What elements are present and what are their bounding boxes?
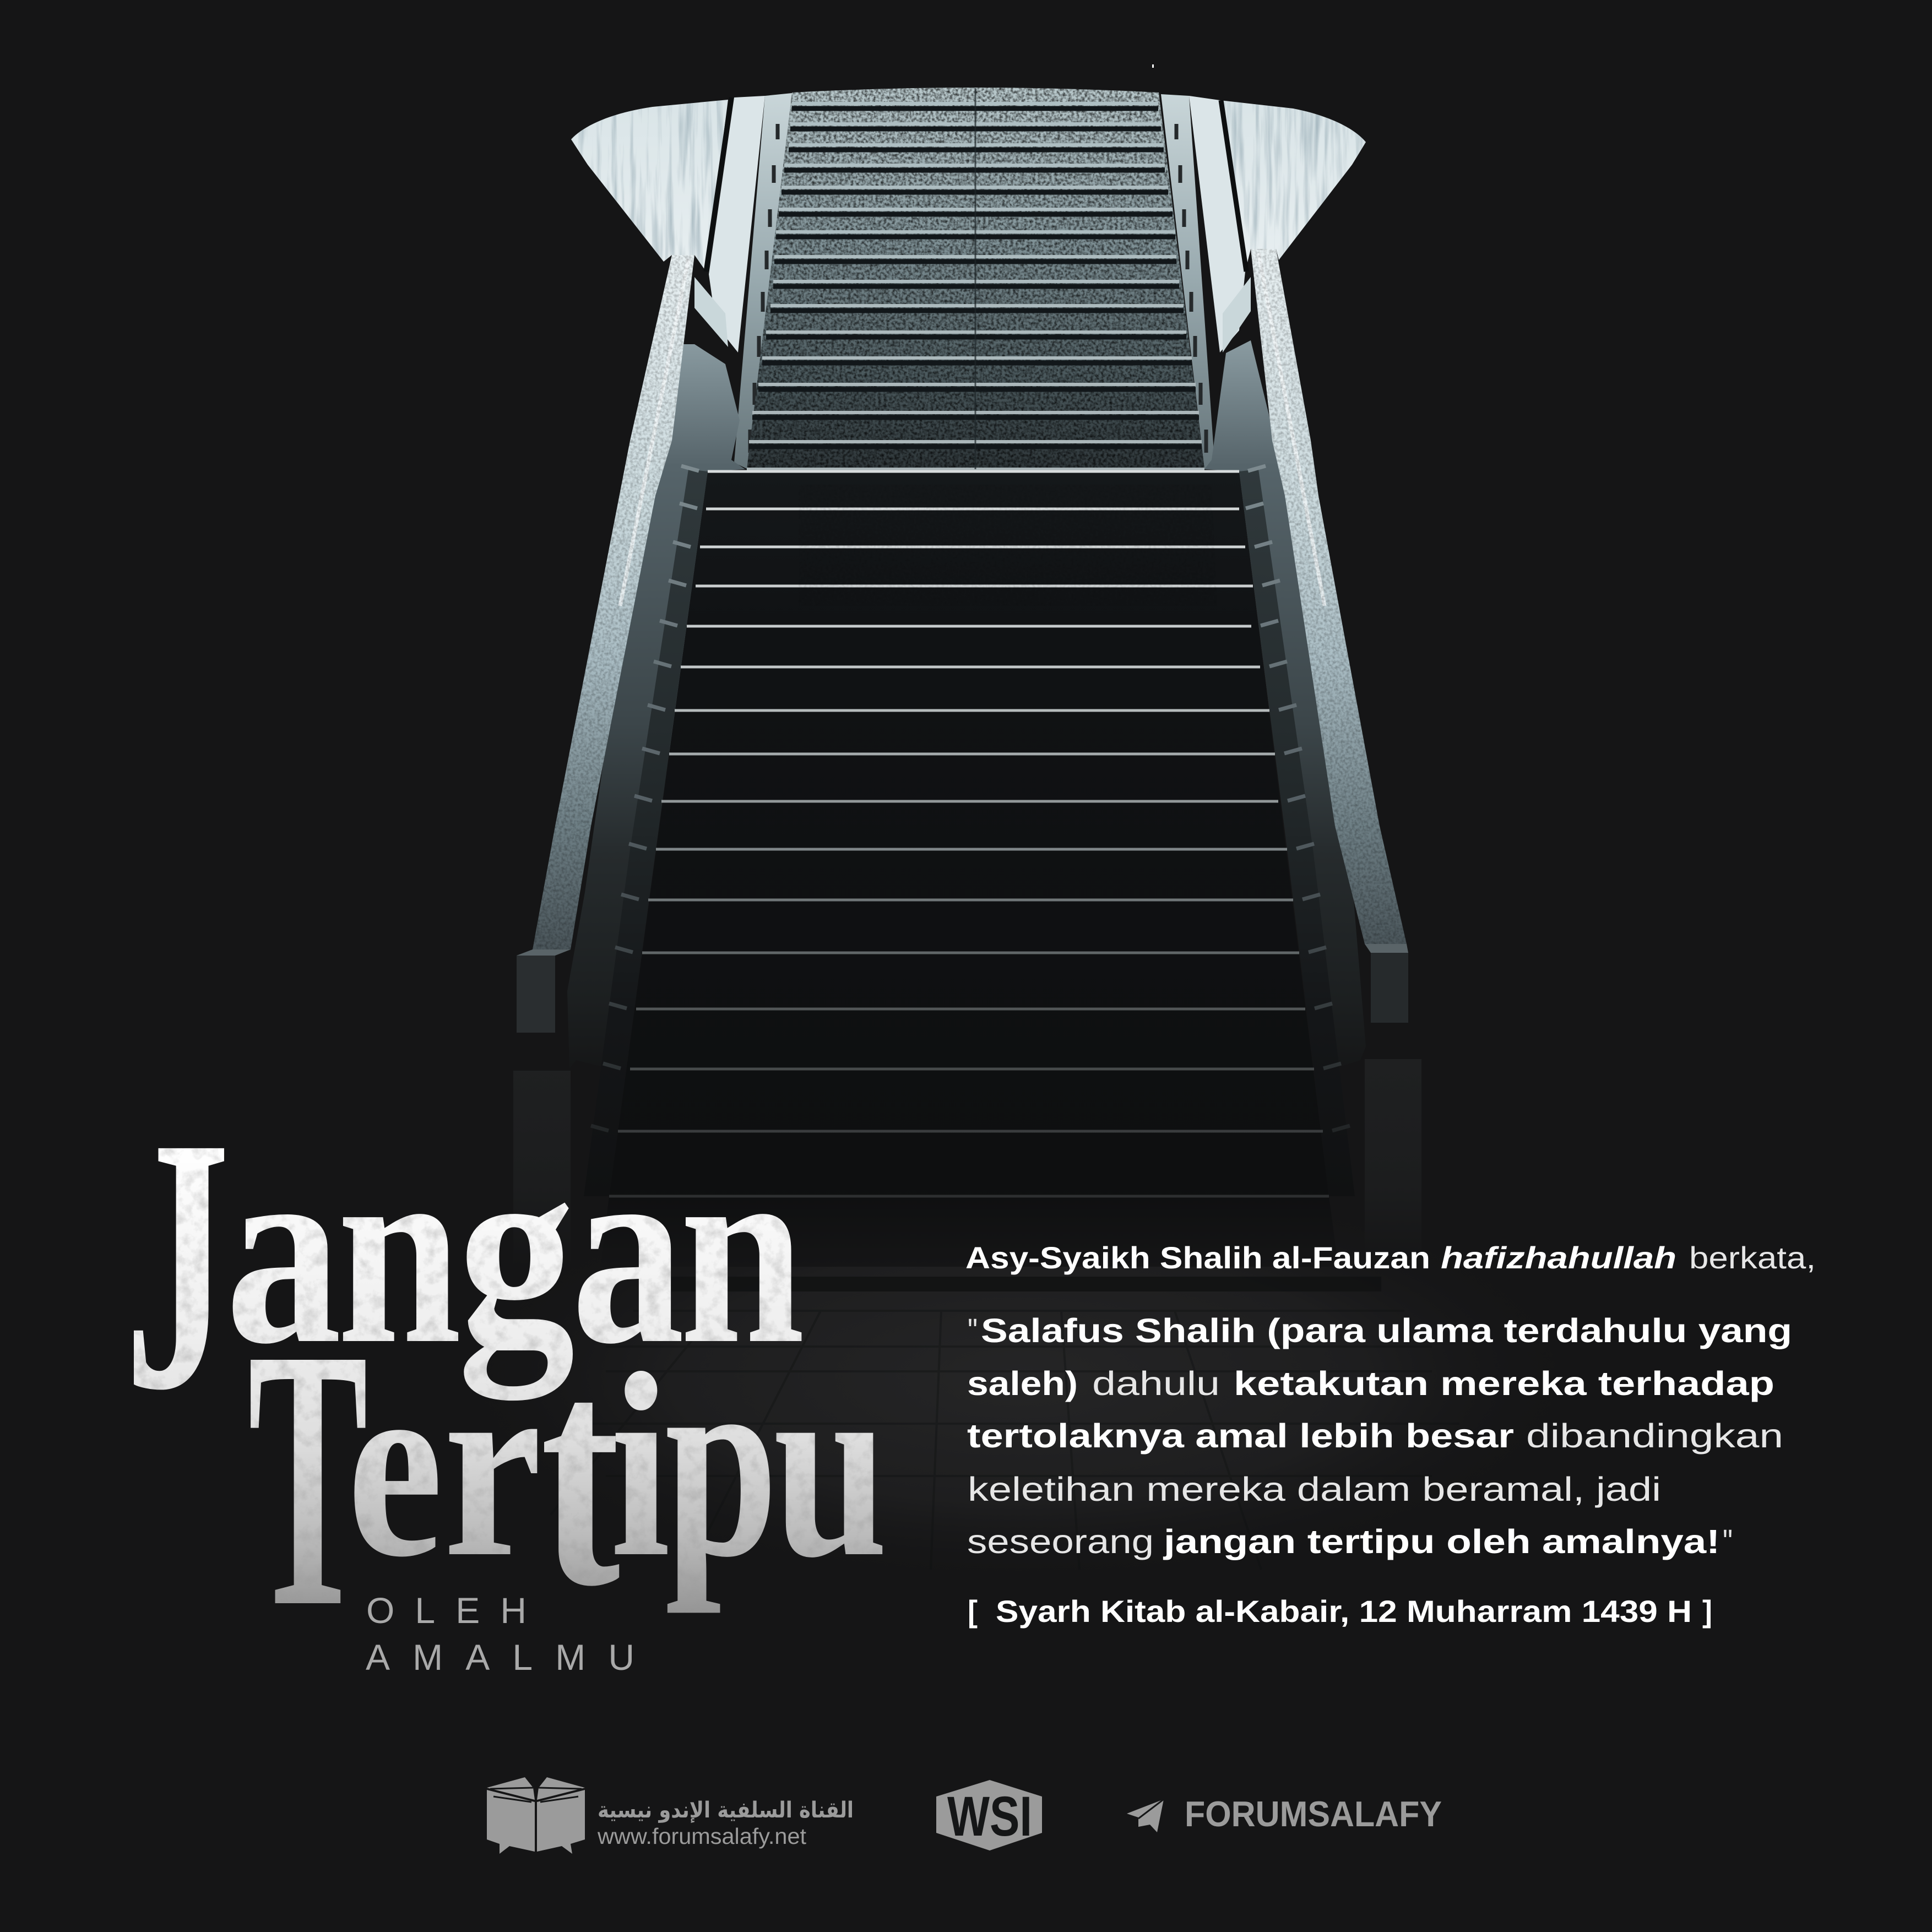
title: Jangan Tertipu: [124, 1062, 888, 1684]
lower tread lines: [609, 471, 1329, 1196]
wing streaks: [571, 100, 1366, 272]
word: Tertipu: T: [248, 1272, 368, 1684]
icon: paper plane: [1127, 1799, 1164, 1832]
illustration: handrails: [513, 249, 1421, 1267]
left wall wing: [571, 100, 728, 272]
upper risers: [747, 88, 1204, 469]
faint grain on the top risers: [799, 485, 1217, 606]
left newel block: [517, 949, 571, 1033]
text: quotation: dibandingkan: [1526, 1417, 1783, 1455]
stringer left: [584, 469, 708, 1196]
left side wall: [567, 344, 745, 1069]
rail bright strips: [620, 253, 1325, 606]
subtitle: oleh amalmu: [366, 1590, 634, 1678]
text: quotation: dahulu: [1092, 1365, 1220, 1402]
right newel block: [1365, 944, 1408, 1023]
dark gaps between wings and inner rails: [706, 97, 1246, 272]
text: source reference: ]: [1702, 1594, 1712, 1629]
text: quotation: jangan tertipu oleh amalnya!: [1163, 1523, 1720, 1560]
right step notches: [1246, 466, 1350, 1131]
word: Tertipu: p: [665, 1310, 778, 1614]
small speck of light: [1152, 64, 1154, 68]
text: attribution line: hafizhahullah: [1441, 1240, 1676, 1275]
right handrail: [1251, 249, 1407, 944]
brand: FORUMSALAFY: FORUMSALAFY: [1185, 1794, 1442, 1834]
word: Tertipu: i: [610, 1318, 670, 1611]
logo text: arabic channel name and website: القناة السلفية الإندو نيسية: [598, 1798, 854, 1823]
logo: open book: [487, 1777, 585, 1854]
word: Tertipu: [248, 1272, 888, 1684]
text: quotation: seseorang: [967, 1523, 1154, 1560]
text: quotation: [967, 1312, 1792, 1560]
word: Tertipu: r: [443, 1318, 542, 1611]
diagonal struts: [694, 277, 728, 347]
stringer right: [1239, 469, 1355, 1196]
subtitle: oleh amalmu: OLEH: [366, 1590, 527, 1631]
text: quotation: ketakutan mereka terhadap: [1234, 1365, 1774, 1402]
right wall wing: [1220, 100, 1366, 272]
word: Jangan: n: [337, 1101, 462, 1400]
text: quotation: ": [968, 1312, 978, 1349]
text: attribution line: Asy-Syaikh Shalih al-Fauzan: [965, 1240, 1430, 1275]
tread nosings: [747, 104, 1204, 469]
right inner rail: [1189, 96, 1245, 352]
word: Jangan: J: [124, 1062, 230, 1465]
right base pier: [1365, 1059, 1421, 1267]
word: Tertipu: t: [540, 1298, 623, 1653]
left handrail: [533, 255, 694, 949]
logo text: arabic channel name and website: [597, 1798, 854, 1849]
text: quotation: tertolaknya amal lebih besar: [967, 1417, 1514, 1455]
text: quotation: saleh): [967, 1365, 1078, 1402]
text: source reference: [: [968, 1594, 978, 1629]
word: Tertipu: u: [773, 1319, 888, 1612]
lower risers: [600, 471, 1338, 1267]
text: quotation: keletihan mereka dalam beramal, jadi: [968, 1470, 1661, 1508]
word: Jangan: a: [225, 1100, 341, 1399]
subtitle: oleh amalmu: AMALMU: [366, 1637, 634, 1678]
centre seam: [975, 88, 976, 469]
illustration: lower flight of stairs: [567, 340, 1366, 1267]
text: quotation: ": [1723, 1523, 1733, 1560]
logo: WSI hexagon: WSI: [947, 1785, 1032, 1848]
logo text: arabic channel name and website: www.forumsalafy.net: [597, 1824, 807, 1849]
illustration: upper flight of stairs: [571, 64, 1366, 469]
left base pier: [513, 1071, 571, 1267]
left inner rail: [709, 96, 765, 352]
tread shadows: [749, 108, 1202, 447]
right side wall: [1204, 340, 1366, 1069]
word: Tertipu: e: [347, 1318, 443, 1611]
word: Jangan: a: [571, 1100, 685, 1399]
word: Jangan: g: [458, 1101, 575, 1404]
left step notches: [591, 466, 699, 1131]
text: attribution line: [965, 1240, 1816, 1275]
upper stair side strings: [734, 93, 792, 469]
word: Jangan: [124, 1062, 805, 1465]
word: Jangan: n: [680, 1101, 805, 1399]
stepped shadow ticks on the strings: [750, 124, 1206, 453]
rail speckle: [533, 249, 1407, 949]
text: attribution line: berkata,: [1689, 1240, 1816, 1275]
paved ground below the stairs: [441, 1168, 1597, 1586]
text: source reference: Syarh Kitab al-Kabair, 12 Muharram 1439 H: [996, 1594, 1692, 1629]
text: quotation: Salafus Shalih (para ulama terdahulu yang: [981, 1312, 1792, 1349]
